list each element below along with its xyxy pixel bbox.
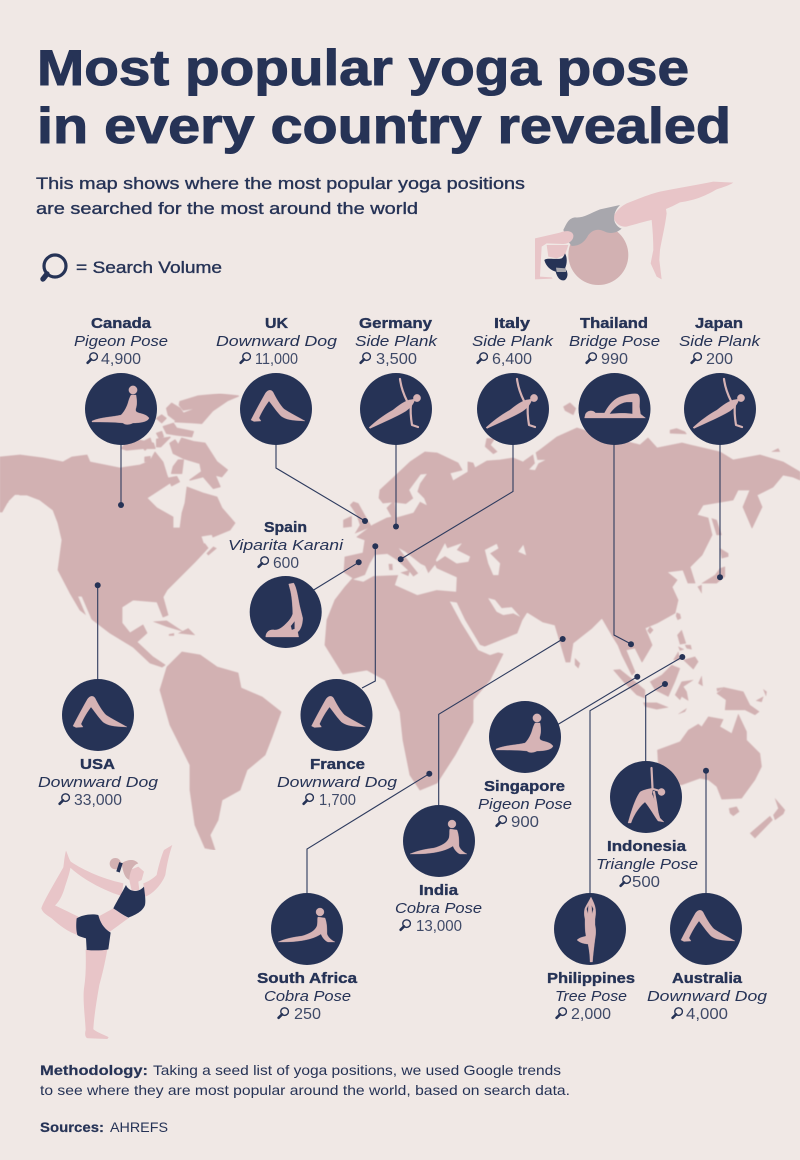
label: Australia	[672, 971, 743, 987]
label: Cobra Pose	[395, 900, 482, 917]
label: 250	[294, 1006, 321, 1023]
islands: Canadian Arctic and Greenland	[122, 394, 238, 488]
label: Side Plank	[355, 333, 439, 350]
label	[277, 757, 398, 809]
Spain	[228, 520, 362, 648]
label: 6,400	[492, 351, 532, 368]
pose icon: pigeon	[85, 373, 157, 445]
leader line	[719, 440, 721, 577]
label	[228, 520, 344, 572]
methodology: to see where they are most popular around the world, based on search data.	[40, 1082, 570, 1098]
label: 33,000	[74, 792, 122, 809]
title: Most popular yoga pose	[37, 40, 689, 96]
pose icon: side plank	[360, 373, 432, 445]
pose icon: viparita karani	[250, 576, 322, 648]
legend text: = Search Volume	[76, 259, 222, 277]
leader line	[614, 440, 631, 644]
label: 900	[511, 814, 539, 831]
Italy	[398, 316, 555, 562]
pose icon: triangle	[610, 761, 682, 833]
label: Downward Dog	[647, 988, 768, 1005]
label: 4,900	[101, 351, 141, 368]
legend: search volume	[43, 255, 222, 279]
subtitle: This map shows where the most popular yoga positions	[36, 175, 525, 193]
label: Pigeon Pose	[478, 796, 572, 813]
leader line	[590, 657, 682, 898]
label	[647, 971, 768, 1023]
pose icon: tree	[554, 893, 626, 965]
label: Downward Dog	[277, 774, 398, 791]
Indonesia	[596, 681, 698, 891]
Red Sea, Persian Gulf and Ob gulf	[450, 443, 545, 655]
icon: magnifying glass	[43, 255, 66, 279]
Mediterranean islands, UK and Ireland	[343, 502, 410, 576]
illustration: woman on exercise ball	[535, 182, 733, 285]
label: 500	[632, 874, 660, 891]
label: 13,000	[416, 918, 462, 935]
inland seas: Baltic, Mediterranean, Black Sea, Caspian	[353, 474, 526, 595]
pose icon: cobra	[271, 893, 343, 965]
sources: AHREFS	[110, 1119, 168, 1135]
leader line	[646, 684, 665, 765]
pose icon: side plank	[477, 373, 549, 445]
label	[596, 839, 698, 891]
label: Canada	[91, 316, 152, 332]
leader line	[395, 440, 397, 526]
label	[38, 757, 159, 809]
pose icon: downward dog	[300, 679, 372, 751]
label: Triangle Pose	[596, 856, 698, 873]
label: Singapore	[484, 779, 565, 795]
label: Cobra Pose	[264, 988, 351, 1005]
label: 990	[601, 351, 628, 368]
label: Tree Pose	[555, 988, 627, 1005]
Philippines	[547, 654, 685, 1023]
label: 11,000	[255, 351, 298, 368]
label	[547, 971, 635, 1023]
pose icon: cobra	[403, 805, 475, 877]
leader line	[307, 774, 429, 898]
label: France	[310, 757, 365, 773]
label: Bridge Pose	[569, 333, 660, 350]
label: Philippines	[547, 971, 635, 987]
methodology	[40, 1062, 570, 1098]
pose icon: pigeon	[489, 701, 561, 773]
islands: South-East Asia, Oceania and Australia	[613, 613, 785, 838]
label	[74, 316, 168, 368]
India	[395, 636, 566, 935]
pose icon: downward dog	[62, 679, 134, 751]
label: Japan	[695, 316, 743, 332]
Canada	[74, 316, 168, 508]
leader line	[97, 585, 99, 685]
label: Italy	[494, 316, 530, 332]
label	[478, 779, 572, 831]
USA	[38, 582, 159, 809]
label: USA	[80, 757, 116, 773]
label: Pigeon Pose	[74, 333, 168, 350]
label: South Africa	[257, 971, 358, 987]
leader line	[120, 440, 122, 505]
pose icon: downward dog	[670, 893, 742, 965]
sources	[40, 1119, 168, 1135]
label: Germany	[359, 316, 432, 332]
label: Side Plank	[679, 333, 762, 350]
label: Indonesia	[607, 839, 687, 855]
Thailand	[569, 316, 660, 647]
illustration: woman in dancer pose	[41, 845, 172, 1039]
label	[395, 883, 482, 935]
islands: Arctic Russia, Japan and Sakhalin	[485, 403, 780, 668]
label: 200	[706, 351, 733, 368]
label: 2,000	[571, 1006, 611, 1023]
label	[569, 316, 660, 368]
label: India	[419, 883, 459, 899]
label	[257, 971, 358, 1023]
label: Downward Dog	[216, 333, 338, 350]
label: 4,000	[686, 1006, 728, 1023]
title	[37, 40, 731, 154]
label	[679, 316, 762, 368]
leader line	[276, 440, 365, 521]
leader line	[401, 440, 513, 559]
landmass: North America	[0, 452, 235, 667]
label	[472, 316, 555, 368]
leader line	[705, 771, 707, 898]
label: UK	[265, 316, 289, 332]
Japan	[679, 316, 762, 580]
Singapore	[478, 674, 640, 831]
leader line	[439, 639, 563, 810]
South Africa	[257, 771, 432, 1023]
label: Downward Dog	[38, 774, 159, 791]
label: 600	[273, 555, 299, 572]
landmass: Europe, Asia and Africa	[325, 428, 800, 790]
France	[277, 543, 398, 809]
pose icon: bridge	[578, 373, 650, 445]
subtitle	[36, 175, 525, 218]
world map	[0, 394, 800, 850]
label: Side Plank	[472, 333, 555, 350]
subtitle: are searched for the most around the world	[36, 200, 418, 218]
sources: Sources:	[40, 1119, 104, 1135]
label	[355, 316, 439, 368]
label: Spain	[264, 520, 307, 536]
landmass: South America	[160, 652, 281, 850]
pose icon: side plank	[684, 373, 756, 445]
leader line	[557, 677, 637, 725]
UK	[216, 316, 368, 524]
label: Viparita Karani	[228, 537, 344, 554]
islands: Caribbean and Newfoundland	[153, 547, 217, 636]
title: in every country revealed	[37, 98, 731, 154]
coastal water cut-outs in the Americas	[8, 495, 213, 621]
label	[216, 316, 338, 368]
leader line	[362, 546, 375, 688]
label: Thailand	[580, 316, 648, 332]
Germany	[355, 316, 439, 530]
label: 3,500	[376, 351, 417, 368]
methodology: Methodology:	[40, 1062, 148, 1078]
leader line	[312, 562, 359, 591]
methodology: Taking a seed list of yoga positions, we used Google trends	[153, 1062, 561, 1078]
pose icon: downward dog	[240, 373, 312, 445]
label: 1,700	[319, 792, 356, 809]
Australia	[647, 768, 768, 1023]
